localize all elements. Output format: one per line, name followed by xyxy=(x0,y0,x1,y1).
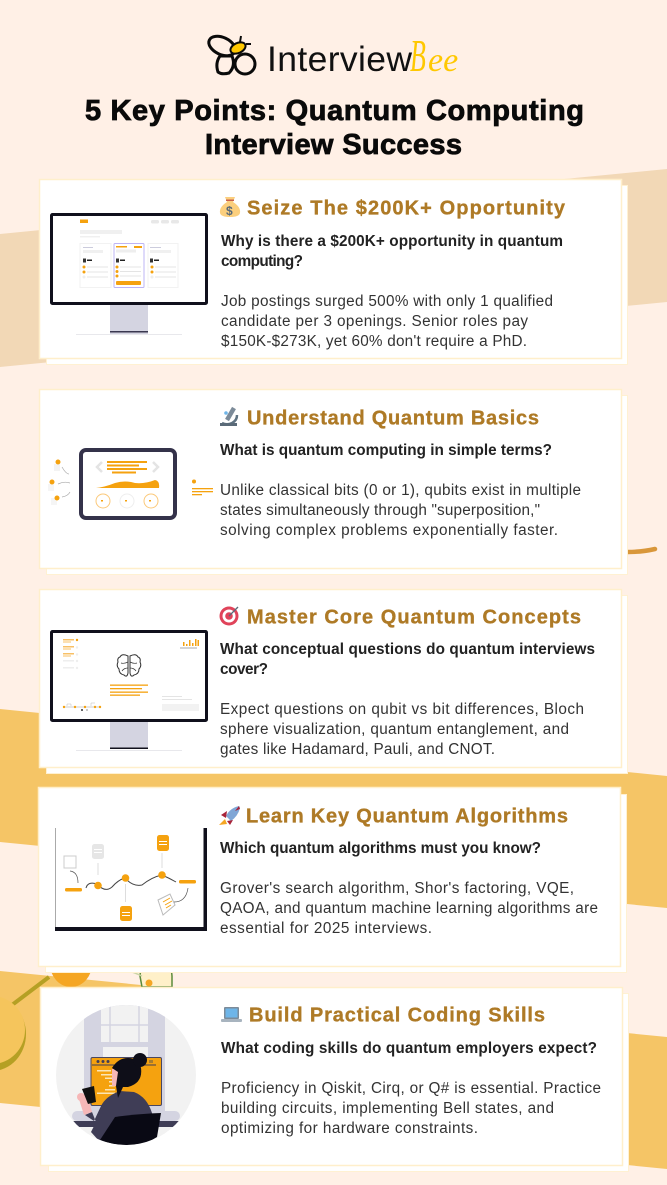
panel: coding skills: Build Practical Coding Skills xyxy=(249,1004,545,1026)
panel: opportunity xyxy=(40,180,628,364)
panel: algorithms: Grover's search algorithm, Shor's factoring, VQE, xyxy=(220,880,574,897)
logo: ee xyxy=(428,42,458,79)
panel: core concepts: What conceptual questions do quantum interviews xyxy=(220,641,595,658)
illustration: monitor with pricing cards xyxy=(52,214,206,335)
panel: coding skills: What coding skills do quantum employers expect? xyxy=(221,1040,597,1057)
panel: core concepts: sphere visualization, quantum entanglement, and xyxy=(220,721,569,738)
illustration: algorithm path xyxy=(55,828,207,931)
illustration: monitor with brain xyxy=(52,632,206,751)
panel: coding skills: building circuits, implementing Bell states, and xyxy=(221,1100,554,1117)
panel: core concepts xyxy=(40,590,628,774)
panel: core concepts: Master Core Quantum Concepts xyxy=(247,606,581,628)
icon: bee xyxy=(206,32,255,74)
panel: core concepts: Expect questions on qubit vs bit differences, Bloch xyxy=(220,701,584,718)
panel: algorithms xyxy=(38,788,626,972)
panel: core concepts: cover? xyxy=(220,661,268,678)
panel: opportunity: Job postings surged 500% with only 1 qualified xyxy=(221,293,553,310)
illustration: tablet xyxy=(48,450,213,518)
panel: algorithms: Which quantum algorithms must you know? xyxy=(220,840,541,857)
panel: coding skills: Proficiency in Qiskit, Cirq, or Q# is essential. Practice xyxy=(221,1080,601,1097)
panel: coding skills: optimizing for hardware constraints. xyxy=(221,1120,478,1137)
panel: basics: Unlike classical bits (0 or 1), qubits exist in multiple xyxy=(220,482,581,499)
panel: basics xyxy=(40,390,628,574)
panel: basics: Understand Quantum Basics xyxy=(247,408,539,430)
panel: opportunity: computing? xyxy=(221,253,303,270)
title: Interview Success xyxy=(205,129,462,161)
icon: brain xyxy=(117,655,141,676)
decoration: magnifier and fruit xyxy=(0,962,172,1071)
icon: money bag xyxy=(220,197,240,218)
logo: Interview xyxy=(267,39,412,79)
icon: money bag: $ xyxy=(226,204,233,218)
illustration: woman coding xyxy=(56,1005,196,1145)
panel: basics: states simultaneously through "superposition," xyxy=(220,502,540,519)
panel: algorithms: Learn Key Quantum Algorithms xyxy=(246,806,568,828)
panel: opportunity: Seize The $200K+ Opportunity xyxy=(247,198,566,220)
panel: core concepts: gates like Hadamard, Pauli, and CNOT. xyxy=(220,741,495,758)
panel: algorithms: QAOA, and quantum machine learning algorithms are xyxy=(220,900,598,917)
panel: coding skills xyxy=(40,988,628,1172)
icon: target xyxy=(220,606,238,626)
icon: laptop xyxy=(221,1007,242,1022)
panel: opportunity: Why is there a $200K+ opportunity in quantum xyxy=(221,233,563,250)
logo: B xyxy=(410,31,426,81)
panel: opportunity: $150K-$273K, yet 60% don't require a PhD. xyxy=(221,333,527,350)
logo xyxy=(206,31,458,81)
panel: basics: solving complex problems exponentially faster. xyxy=(220,522,558,539)
panel: basics: What is quantum computing in simple terms? xyxy=(220,442,552,459)
panel: opportunity: candidate per 3 openings. Senior roles pay xyxy=(221,313,528,330)
title: 5 Key Points: Quantum Computing xyxy=(85,95,584,127)
icon: rocket xyxy=(219,806,240,825)
title xyxy=(85,95,584,161)
panel: algorithms: essential for 2025 interviews. xyxy=(220,920,432,937)
icon: microscope xyxy=(220,408,237,426)
